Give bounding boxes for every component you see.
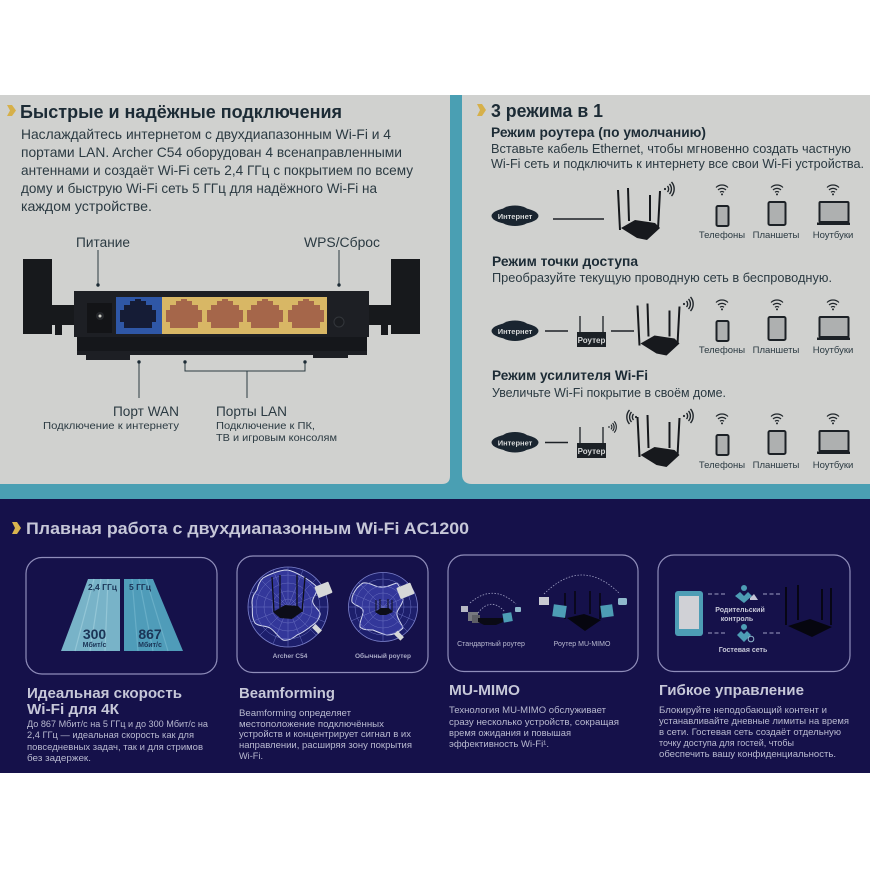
band 2.4 GHz trapezoid: 300: [83, 626, 106, 642]
body text: дому и быструю Wi-Fi сеть 5 ГГц для надёжного Wi-Fi на: [21, 180, 377, 196]
text: beamforming: Beamforming: [239, 686, 335, 702]
body text: [21, 126, 413, 214]
text: ideal speed: Идеальная скорость: [27, 686, 182, 702]
panel: fast and reliable connections: [0, 95, 450, 484]
text: MU-MIMO: MU-MIMO: [449, 683, 520, 699]
client devices: Планшеты: [753, 460, 800, 471]
text: ideal speed: без задержек.: [27, 753, 91, 764]
signal waves: [664, 182, 674, 196]
text: beamforming: устройств и концентрирует сигнал в их: [239, 729, 411, 740]
left antenna: [23, 259, 75, 335]
text: ideal speed: До 867 Мбит/с на 5 ГГц и до 300 Мбит/с на: [27, 719, 209, 730]
band 2.4 GHz trapezoid: [61, 579, 120, 651]
label: LAN ports: ТВ и игровым консолям: [216, 432, 337, 444]
Archer router: [618, 188, 660, 240]
mode: range extender: Режим усилителя Wi-Fi: [492, 368, 648, 383]
MU-MIMO router: [539, 575, 627, 648]
label: WAN port: [43, 360, 180, 432]
cloud: [492, 206, 538, 226]
signal waves: [627, 409, 693, 424]
heading: smooth dual-band: Плавная работа с двухдиапазонным Wi-Fi AC1200: [26, 519, 469, 538]
cloud: Интернет: [498, 438, 533, 448]
label: WAN port: Подключение к интернету: [43, 420, 180, 432]
text: flexible management: точку доступа для гостей, чтобы: [659, 738, 794, 749]
text: beamforming: Beamforming определяет: [239, 708, 352, 719]
parental control icon: Родительский: [715, 606, 765, 614]
text: flexible management: Гибкое управление: [659, 683, 804, 699]
panel: dual-band Wi-Fi: [0, 499, 870, 773]
text: ideal speed: повседневных задач, так и для стримов: [27, 742, 203, 753]
teal box band: [0, 95, 870, 500]
LAN ports: [162, 297, 327, 334]
text: flexible management: [659, 683, 849, 760]
mode: access point: Преобразуйте текущую проводную сеть в беспроводную.: [492, 271, 832, 285]
body text: каждом устройстве.: [21, 198, 152, 214]
client devices: [699, 185, 853, 241]
cloud: [492, 432, 538, 452]
MU-MIMO router: Роутер MU-MIMO: [554, 641, 611, 648]
client devices: Ноутбуки: [813, 460, 853, 471]
cloud: Интернет: [498, 212, 533, 221]
text: beamforming: местоположение подключённых: [239, 719, 384, 730]
mode: router: [491, 125, 864, 241]
heading: fast connections: Быстрые и надёжные подключения: [20, 102, 342, 122]
text: flexible management: Блокируйте неподобающий контент и: [659, 705, 827, 716]
text: ideal speed: [27, 686, 209, 764]
label: WPS reset: [304, 235, 380, 287]
text: beamforming: Wi-Fi.: [239, 751, 263, 762]
panel: three modes: [462, 95, 870, 484]
text: ideal speed: Wi-Fi для 4К: [27, 702, 119, 718]
power socket: [87, 303, 112, 333]
body text: портами LAN. Archer C54 оборудован 4 всенаправленными: [21, 144, 402, 160]
client devices: Ноутбуки: [813, 230, 853, 241]
mode: router: Вставьте кабель Ethernet, чтобы мгновенно создать частную: [491, 142, 851, 156]
card: speed chart: [26, 558, 217, 674]
label: WAN port: Порт WAN: [113, 404, 179, 419]
standard router: [457, 593, 525, 648]
body text: Наслаждайтесь интернетом с двухдиапазонным Wi-Fi и 4: [21, 126, 391, 142]
tablet: [675, 591, 703, 636]
cloud: Интернет: [498, 327, 533, 336]
label: power: [76, 235, 130, 287]
Archer C54 coverage: Archer C54: [273, 653, 308, 660]
standard router: Стандартный роутер: [457, 640, 525, 648]
client devices: [699, 414, 853, 471]
label: WPS reset: WPS/Сброс: [304, 235, 380, 250]
Archer router: [638, 415, 680, 467]
router body: [74, 291, 369, 360]
band 5 GHz trapezoid: 5 ГГц: [129, 582, 152, 592]
card: MU-MIMO: [448, 555, 638, 672]
band 2.4 GHz trapezoid: Мбит/с: [83, 641, 106, 649]
right antenna: [368, 259, 420, 335]
client devices: Телефоны: [699, 230, 745, 241]
client devices: [699, 300, 853, 356]
text: ideal speed: 2,4 ГГц — идеальная скорость как для: [27, 730, 194, 741]
mode: router: Режим роутера (по умолчанию): [491, 125, 706, 140]
text: MU-MIMO: эффективность Wi-Fi¹.: [449, 739, 549, 750]
band 5 GHz trapezoid: [124, 579, 183, 651]
parental control icon: [715, 585, 765, 623]
mode: range extender: Увеличьте Wi-Fi покрытие в своём доме.: [492, 386, 726, 400]
label: power: Питание: [76, 235, 130, 250]
parental control icon: контроль: [721, 616, 754, 623]
mode: access point: Режим точки доступа: [492, 254, 639, 269]
text: flexible management: обеспечить вашу конфиденциальность.: [659, 749, 836, 760]
WPS button: [334, 317, 344, 327]
client devices: Планшеты: [753, 230, 800, 241]
text: MU-MIMO: [449, 683, 619, 750]
home router: Роутер: [578, 447, 605, 456]
router rear view: [23, 259, 420, 360]
heading: 3 modes: 3 режима в 1: [491, 101, 603, 121]
cloud: [492, 320, 538, 341]
text: flexible management: устанавливайте дневные лимиты на время: [659, 716, 849, 727]
label: LAN ports: Подключение к ПК,: [216, 420, 315, 432]
guest network icon: Гостевая сеть: [719, 647, 768, 654]
band 2.4 GHz trapezoid: 2,4 ГГц: [88, 582, 118, 592]
Archer router: [638, 304, 680, 356]
text: flexible management: в сети. Гостевая сеть создаёт отдельную: [659, 727, 841, 738]
band 5 GHz trapezoid: Мбит/с: [138, 641, 162, 649]
label: LAN ports: [183, 360, 337, 444]
mode: router: Wi-Fi сеть и подключить к интернету все свои Wi-Fi устройства.: [491, 157, 864, 171]
body text: антеннами и создаёт Wi-Fi сеть 2,4 ГГц с покрытием по всему: [21, 162, 413, 178]
guest network icon: [719, 624, 768, 654]
ordinary router coverage: [348, 572, 418, 660]
home router: [577, 316, 606, 347]
text: beamforming: направлении, расширяя зону покрытия: [239, 740, 412, 751]
text: MU-MIMO: сразу несколько устройств, сокращая: [449, 717, 619, 728]
client devices: Планшеты: [753, 345, 800, 356]
Archer C54 coverage: [248, 567, 333, 660]
text: MU-MIMO: Технология MU-MIMO обслуживает: [449, 705, 607, 716]
WAN port: [116, 297, 162, 334]
Archer router: [786, 585, 832, 637]
ordinary router coverage: Обычный роутер: [355, 652, 411, 660]
client devices: Телефоны: [699, 345, 745, 356]
label: LAN ports: Порты LAN: [216, 404, 287, 419]
client devices: Ноутбуки: [813, 345, 853, 356]
client devices: Телефоны: [699, 460, 745, 471]
signal waves: [683, 297, 693, 311]
mode: range extender: [492, 368, 853, 471]
text: MU-MIMO: время ожидания и повышая: [449, 728, 571, 739]
text: beamforming: [239, 686, 412, 762]
band 5 GHz trapezoid: 867: [138, 626, 162, 642]
mode: access point: [492, 254, 853, 356]
home router: Роутер: [578, 336, 605, 345]
card: flexible management: [658, 555, 850, 672]
home router: [577, 421, 616, 458]
card: beamforming: [237, 556, 428, 672]
